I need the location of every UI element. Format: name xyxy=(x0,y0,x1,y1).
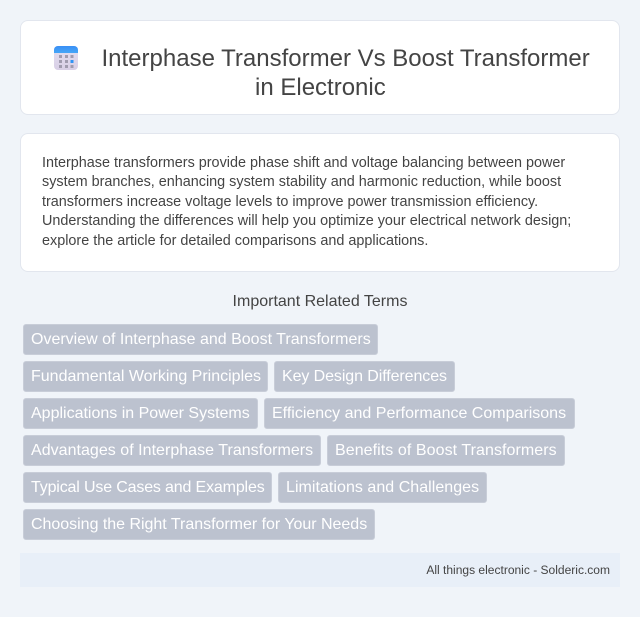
tag xyxy=(23,435,321,466)
tag: Applications in Power Systems xyxy=(31,405,250,422)
description text: system branches, enhancing system stability and harmonic reduction, while boost xyxy=(42,174,561,190)
tag xyxy=(264,398,575,429)
panel: related term tags xyxy=(23,324,575,540)
tag xyxy=(23,398,258,429)
icon: calendar grid xyxy=(54,46,78,70)
title: in Electronic xyxy=(255,74,386,101)
tag: Efficiency and Performance Comparisons xyxy=(272,405,566,422)
title xyxy=(102,45,590,101)
footer text: All things electronic - Solderic.com xyxy=(426,563,610,577)
description text: Understanding the differences will help you optimize your electrical network design; xyxy=(42,213,571,229)
tag xyxy=(23,361,268,392)
tag xyxy=(274,361,455,392)
tag: Advantages of Interphase Transformers xyxy=(31,442,313,459)
tag xyxy=(278,472,487,503)
heading: related terms: Important Related Terms xyxy=(233,293,407,310)
tag xyxy=(23,324,378,355)
tag: Key Design Differences xyxy=(282,368,447,385)
tag: Typical Use Cases and Examples xyxy=(31,479,265,496)
tag: Benefits of Boost Transformers xyxy=(335,442,557,459)
tag: Choosing the Right Transformer for Your Needs xyxy=(31,516,367,533)
footer bar xyxy=(20,553,620,587)
tag xyxy=(327,435,565,466)
tag xyxy=(23,472,272,503)
tag xyxy=(23,509,375,540)
panel: title card xyxy=(20,20,620,115)
description text: transformers increase voltage levels to improve power transmission efficiency. xyxy=(42,194,538,210)
description text xyxy=(42,155,571,249)
description text: explore the article for detailed comparisons and applications. xyxy=(42,233,428,249)
tag: Fundamental Working Principles xyxy=(31,368,261,385)
panel: description card xyxy=(20,133,620,272)
tag: Limitations and Challenges xyxy=(286,479,479,496)
tag: Overview of Interphase and Boost Transformers xyxy=(31,331,371,348)
description text: Interphase transformers provide phase shift and voltage balancing between power xyxy=(42,155,565,171)
title: Interphase Transformer Vs Boost Transformer xyxy=(102,45,590,72)
